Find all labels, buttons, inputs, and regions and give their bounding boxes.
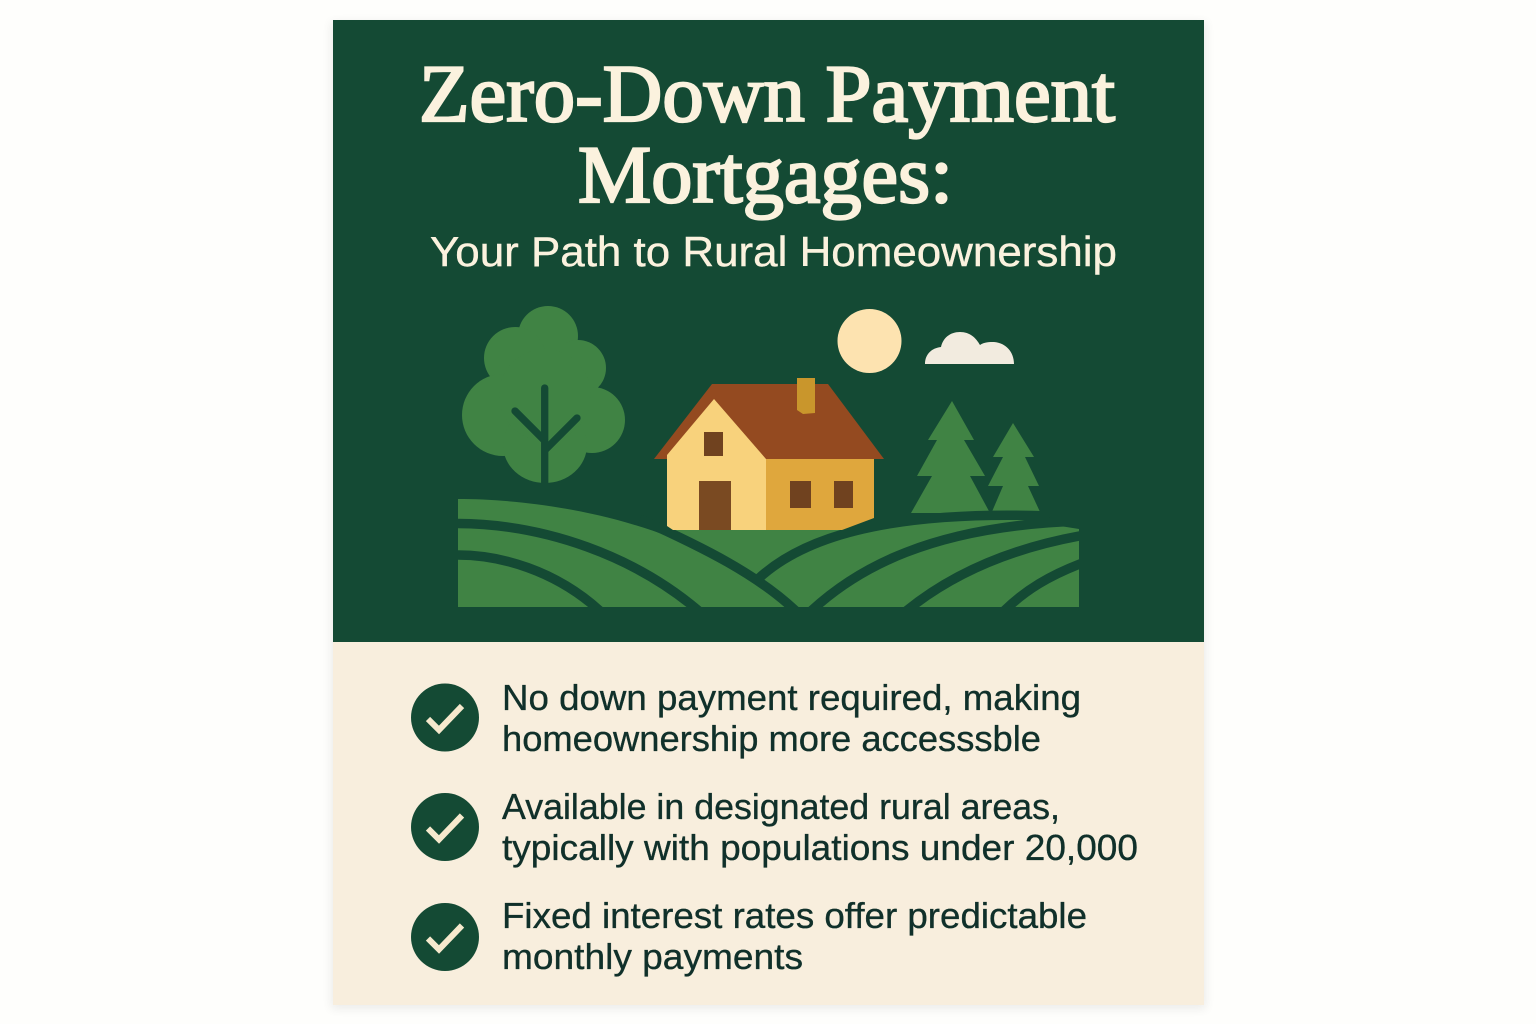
benefit text: homeownership more accesssble (502, 718, 1041, 759)
icon: check (411, 684, 479, 752)
panel: benefits (333, 642, 1204, 1005)
benefit text: Available in designated rural areas, (502, 786, 1060, 827)
benefit text (502, 895, 1087, 977)
benefit text (502, 786, 1138, 868)
window left (790, 481, 811, 508)
door (699, 481, 731, 530)
left wall (667, 399, 766, 530)
title (419, 48, 1115, 220)
icon: check (411, 793, 479, 861)
panel: header (333, 20, 1204, 642)
chimney (797, 378, 815, 414)
icon: cloud (925, 332, 1014, 364)
icon: tree (462, 306, 625, 486)
title: Mortgages: (578, 129, 953, 220)
benefit 2 (411, 786, 1138, 868)
window right (834, 481, 853, 508)
icon: sun (838, 309, 902, 373)
benefit 1 (411, 677, 1081, 759)
gable window (704, 432, 723, 456)
benefit text: typically with populations under 20,000 (502, 827, 1138, 868)
icon: house (654, 378, 884, 530)
subtitle: Your Path to Rural Homeownership (430, 228, 1117, 275)
illustration: rural landscape (458, 306, 1085, 615)
benefit text: Fixed interest rates offer predictable (502, 895, 1087, 936)
roof (654, 384, 884, 459)
benefit text: monthly payments (502, 936, 803, 977)
benefit text: No down payment required, making (502, 677, 1081, 718)
icon: check (411, 903, 479, 971)
benefit text (502, 677, 1081, 759)
benefit 3 (411, 895, 1087, 977)
hills (458, 499, 1085, 615)
icon: pine trees (911, 401, 1041, 514)
right wall (766, 459, 874, 530)
title: Zero-Down Payment (419, 48, 1115, 139)
